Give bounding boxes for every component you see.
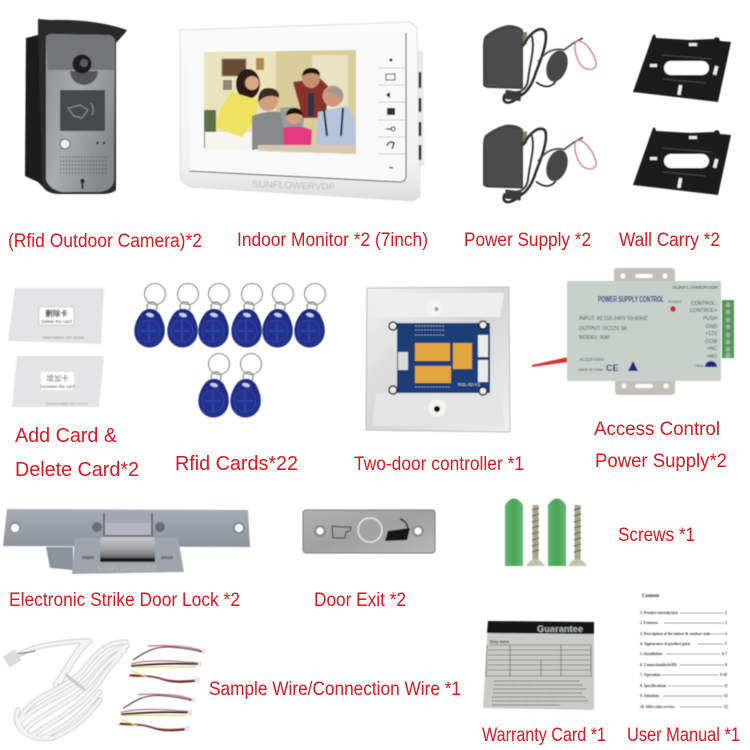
label: outdoor camera: (Rfid Outdoor Camera)*2 bbox=[8, 231, 202, 252]
brand text on monitor: SUNFLOWERVDP bbox=[252, 179, 335, 193]
device printing: AC110-240V bbox=[579, 357, 604, 362]
panel: add and delete cards: Delete the card bbox=[41, 319, 72, 324]
panel: electronic strike lock bbox=[3, 509, 250, 574]
panel: user manual contents page bbox=[640, 594, 728, 709]
panel: user manual contents page: 4 bbox=[725, 632, 727, 636]
panel: user manual contents page: 6-7 bbox=[722, 652, 727, 656]
label: access control power supply: Power Supply*2 bbox=[595, 451, 727, 472]
cable coil bbox=[3, 641, 127, 739]
panel: user manual contents page: 9-10 bbox=[720, 673, 727, 677]
panel: user manual contents page: 12 bbox=[724, 694, 728, 698]
device printing: MADE IN CHINA bbox=[579, 368, 604, 372]
device printing: OUTPUT: DC12V 3A bbox=[579, 326, 628, 332]
RFID reader panel bbox=[60, 90, 105, 131]
panel: user manual contents page: 5. Installation bbox=[640, 652, 663, 656]
panel: user manual contents page: 3. Description of the indoor & outdoor unit bbox=[640, 632, 710, 636]
device printing: -COM bbox=[704, 339, 717, 345]
panel: door exit button bbox=[303, 510, 435, 553]
panel: user manual contents page: Content bbox=[642, 594, 660, 599]
label: sample wire: Sample Wire/Connection Wire *1 bbox=[209, 679, 461, 700]
label: screws: Screws *1 bbox=[618, 525, 695, 546]
circuit board: RSL-02-V1 bbox=[458, 382, 481, 387]
panel: indoor monitor bbox=[180, 22, 424, 201]
device printing: +12V bbox=[705, 331, 718, 337]
label: strike lock: Electronic Strike Door Lock *2 bbox=[9, 590, 240, 611]
device printing: CONTROL+ bbox=[690, 308, 717, 314]
label: RFID cards: Rfid Cards*22 bbox=[175, 453, 298, 475]
panel: warranty card bbox=[483, 621, 594, 710]
panel: user manual contents page: 8 bbox=[725, 663, 727, 667]
panel: electronic strike lock: SUNFLOWERVDP bbox=[97, 566, 157, 573]
panel: white cable and connection wires bbox=[3, 641, 206, 739]
panel: user manual contents page: 7. Operation bbox=[640, 673, 661, 677]
label: door exit: Door Exit *2 bbox=[314, 590, 406, 611]
panel: user manual contents page: 9. Attention bbox=[640, 694, 660, 698]
panel: user manual contents page: 3 bbox=[725, 621, 727, 625]
icon: camera lens bbox=[70, 54, 98, 85]
panel: add and delete cards bbox=[8, 288, 104, 407]
label: two-door controller: Two-door controller *1 bbox=[354, 454, 524, 475]
panel: user manual contents page: 2 bbox=[725, 611, 727, 615]
circuit board bbox=[397, 323, 490, 393]
panel: add and delete cards: 0006796941 097,59349 bbox=[42, 335, 85, 340]
label: access control: Access Control bbox=[594, 419, 720, 440]
device printing bbox=[579, 285, 718, 373]
device printing: Time bbox=[695, 363, 705, 368]
device printing: GND bbox=[706, 324, 717, 330]
panel: add and delete cards: 增加卡 bbox=[46, 373, 69, 383]
panel: user manual contents page: 5 bbox=[725, 642, 727, 646]
panel: add and delete cards: 删除卡 bbox=[45, 308, 68, 318]
device printing: POWER SUPPLY CONTROL bbox=[598, 295, 664, 304]
panel: user manual contents page: 8. Specifications bbox=[640, 684, 667, 688]
device printing: CONTROL- bbox=[691, 301, 717, 307]
panel: user manual contents page: 10. After sales service bbox=[640, 705, 675, 709]
panel: user manual contents page: 4. Appearance of product parts bbox=[640, 642, 691, 646]
panel: add and delete cards: Increase the card bbox=[40, 384, 75, 389]
label: add and delete card: Add Card & bbox=[15, 425, 118, 447]
label: wall carry: Wall Carry *2 bbox=[619, 230, 720, 251]
panel: warranty card: Shop Name bbox=[490, 640, 509, 644]
panel: add and delete cards: 0006414366 097,37374 bbox=[46, 401, 89, 406]
speaker grille bbox=[60, 157, 107, 173]
device printing: INPUT: AC110-240V 50-60HZ bbox=[579, 316, 648, 322]
panel: warranty card: Guarantee bbox=[537, 624, 583, 634]
label: indoor monitor: Indoor Monitor *2 (7inch) bbox=[237, 230, 428, 251]
panel: user manual contents page: 12 bbox=[724, 705, 728, 709]
device printing: POWER bbox=[668, 300, 682, 304]
device printing: CE bbox=[606, 363, 619, 373]
device printing: SUNFLOWERVDP bbox=[672, 285, 718, 290]
label: warranty card: Warranty Card *1 bbox=[482, 725, 606, 746]
panel: RFID outdoor camera bbox=[25, 19, 127, 194]
panel: two-door controller bbox=[366, 287, 510, 432]
panel: user manual contents page: 2. Features bbox=[640, 621, 658, 625]
panel: wall plugs and screws bbox=[505, 498, 587, 566]
panel: user manual contents page: 6. Connection(lock/ID) bbox=[640, 663, 678, 667]
photo screen bbox=[200, 48, 360, 158]
panel: wall brackets bbox=[633, 34, 731, 195]
panel: RFID key fobs bbox=[134, 284, 326, 418]
monitor buttons bbox=[378, 58, 405, 168]
panel: access control power supply bbox=[532, 268, 734, 395]
panel: power adapters bbox=[483, 25, 596, 202]
label: delete card count: Delete Card*2 bbox=[15, 459, 139, 481]
device printing: +NO bbox=[707, 354, 717, 360]
label: power supply: Power Supply *2 bbox=[464, 230, 591, 251]
device printing: +NC bbox=[707, 346, 717, 352]
device printing: PUSH bbox=[703, 316, 717, 322]
panel: user manual contents page: 1. Product introduction bbox=[640, 611, 679, 615]
device printing: MODEL: K80 bbox=[579, 335, 610, 341]
panel: user manual contents page: 11 bbox=[724, 684, 728, 688]
